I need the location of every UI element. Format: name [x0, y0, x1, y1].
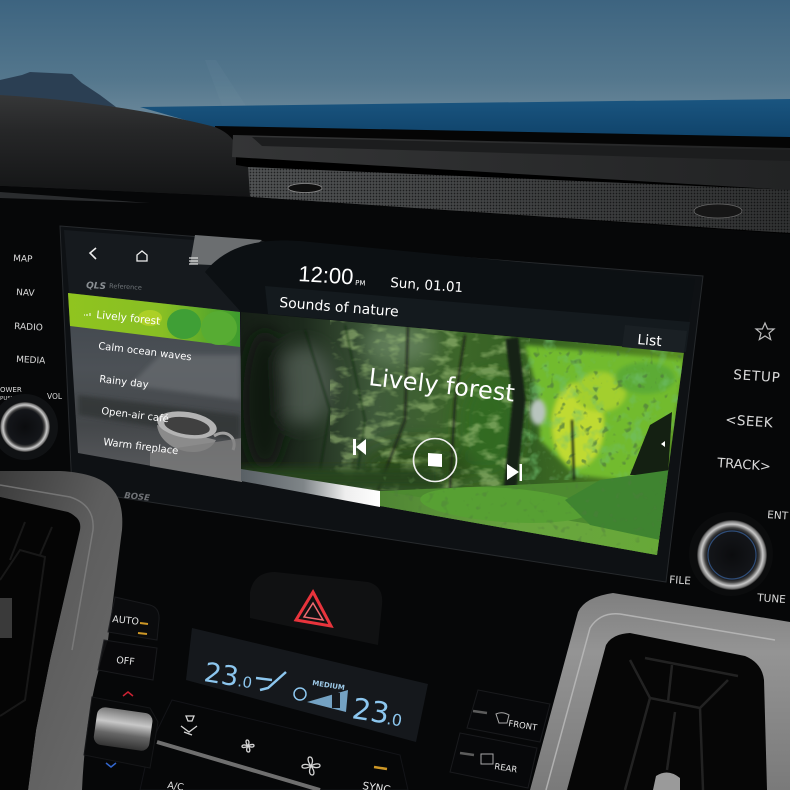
screen bezel	[60, 226, 703, 582]
right side controls	[669, 323, 789, 606]
black gap under windscreen	[215, 126, 790, 160]
glossy highlight	[0, 192, 150, 203]
right side controls: FILE	[669, 574, 691, 588]
off button	[98, 640, 157, 680]
left side buttons: PUSH	[0, 396, 15, 402]
tune knob	[689, 512, 773, 596]
bose logo: BOSE	[124, 491, 150, 504]
vent knob	[0, 598, 12, 638]
selected row	[68, 293, 240, 347]
side arrow	[661, 441, 665, 447]
status panel dark arc	[205, 240, 695, 352]
forest picture	[240, 300, 690, 560]
list items: Calm ocean waves	[98, 341, 192, 363]
mid forest mottling	[330, 320, 530, 490]
right trunk	[630, 412, 672, 475]
vent surround highlight	[546, 614, 775, 790]
front rear buttons	[467, 690, 550, 742]
vent knob	[653, 772, 680, 790]
ground shrubs	[240, 468, 440, 488]
button panel	[140, 700, 408, 790]
seat and fan icons	[181, 716, 320, 775]
left side buttons: MEDIA	[16, 355, 46, 367]
right air vent	[530, 593, 790, 790]
speaker grille	[248, 167, 790, 233]
right side controls: TUNE	[756, 592, 786, 606]
lower chrome strip	[157, 742, 320, 790]
vent opening	[0, 497, 80, 790]
climate display: 23	[350, 691, 392, 731]
next icon	[507, 464, 522, 481]
right side controls: SETUP	[733, 367, 781, 386]
clock: PM	[355, 279, 366, 288]
brand label: QLS	[86, 281, 106, 292]
distant mountain	[0, 72, 116, 107]
right side controls: <SEEK	[725, 412, 774, 431]
clock: 12:00	[298, 261, 354, 289]
climate display	[186, 628, 428, 742]
misty patches	[243, 325, 520, 487]
climate buttons: AUTO	[112, 614, 139, 628]
left air vent	[0, 471, 122, 790]
clock: Sun, 01.01	[390, 275, 464, 296]
bright canopy	[525, 345, 684, 480]
selected row leaves	[138, 309, 237, 345]
climate display: .0	[385, 709, 403, 730]
brand label: Reference	[109, 282, 142, 292]
climate display: .0	[236, 672, 253, 692]
previous icon	[353, 439, 366, 455]
progress bar	[241, 469, 380, 507]
climate display: 23	[202, 657, 241, 693]
right bush	[565, 470, 670, 540]
status header band	[265, 286, 690, 352]
gap of white sky	[530, 399, 546, 425]
menu icon	[189, 258, 198, 264]
glass reflection	[205, 60, 246, 106]
left side buttons	[0, 254, 63, 402]
left side buttons: MAP	[13, 254, 33, 265]
left side buttons: RADIO	[14, 322, 43, 333]
section title: Sounds of nature	[279, 295, 399, 320]
selected row text: Lively forest	[96, 309, 161, 328]
vent louvre frame	[0, 522, 52, 716]
right side controls: TRACK>	[716, 456, 771, 475]
grass texture	[383, 476, 658, 554]
upper trim tray	[232, 135, 790, 190]
windscreen sky	[0, 0, 790, 145]
home icon	[137, 251, 147, 261]
hedge	[420, 487, 582, 523]
fan level	[294, 688, 348, 712]
vent frame	[625, 658, 738, 790]
list panel	[68, 293, 242, 482]
top bar reflection	[190, 235, 262, 266]
grass strip	[380, 478, 670, 560]
top bar panel	[64, 230, 260, 312]
forest base	[240, 300, 690, 560]
left side buttons: OWER	[0, 386, 22, 394]
list items: Open-air café	[101, 405, 169, 425]
grille ovals	[288, 184, 742, 218]
canopy leaf texture	[520, 340, 690, 480]
hazard button	[250, 572, 382, 645]
back icon	[90, 248, 96, 259]
list button: List	[637, 332, 663, 350]
coffee cup	[150, 407, 242, 482]
vent surround	[530, 593, 790, 790]
clock	[298, 261, 464, 296]
climate buttons: OFF	[116, 655, 135, 668]
ocean texture	[78, 355, 240, 440]
brand label	[86, 281, 142, 292]
left side buttons: NAV	[16, 288, 36, 299]
main black panel	[0, 186, 790, 790]
stop button	[414, 438, 456, 482]
climate display: MEDIUM	[312, 679, 345, 692]
climate buttons	[98, 597, 550, 790]
left side buttons: VOL	[47, 392, 63, 401]
airflow icon	[256, 672, 286, 690]
tree trunks	[305, 325, 574, 490]
right side controls: ENT	[767, 509, 789, 522]
climate buttons: REAR	[494, 762, 518, 776]
vent opening	[567, 633, 767, 790]
list items: Rainy day	[99, 374, 149, 391]
vent surround highlight	[0, 485, 93, 650]
list items: Warm fireplace	[103, 437, 179, 457]
list button	[622, 325, 687, 353]
auto button	[108, 597, 159, 640]
favourite star	[756, 323, 774, 340]
sea horizon	[140, 99, 790, 140]
climate buttons: FRONT	[508, 719, 539, 734]
volume knob	[0, 394, 58, 460]
now playing title: Lively forest	[367, 363, 516, 408]
list items	[98, 341, 192, 457]
dash hood	[0, 95, 250, 197]
temperature lever	[84, 692, 158, 768]
vent surround	[0, 471, 122, 790]
bright lower strip	[381, 497, 660, 555]
